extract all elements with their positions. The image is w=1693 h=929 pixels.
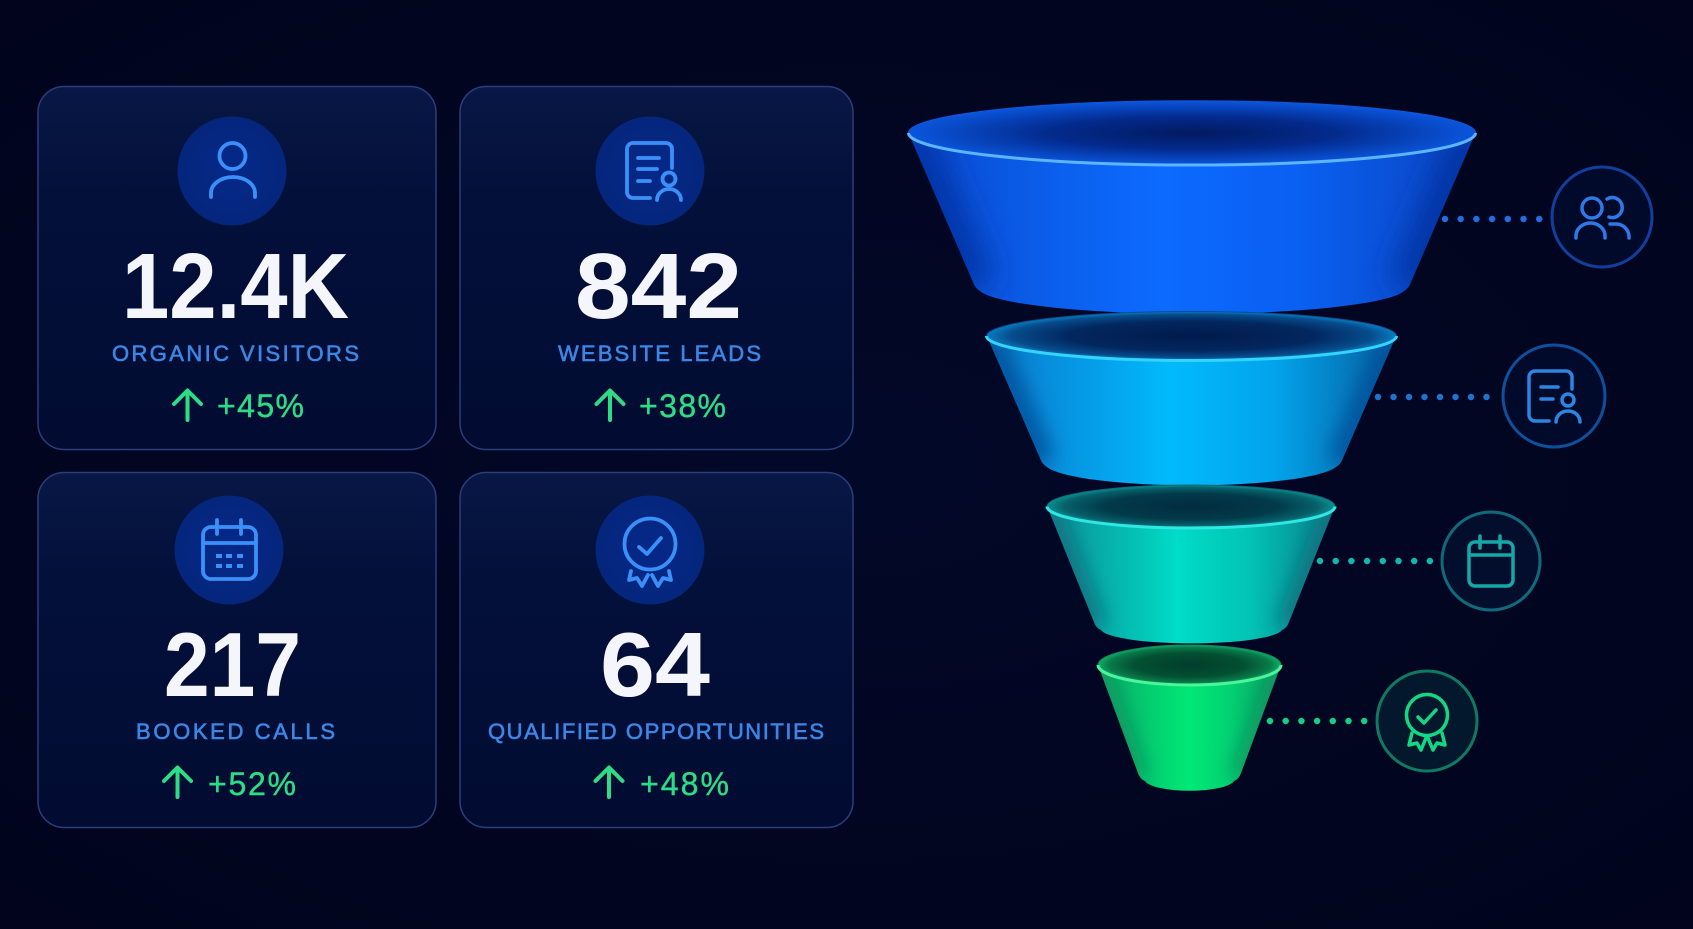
funnel tier 4: green	[1098, 645, 1281, 791]
icon: award badge, green	[1377, 671, 1477, 771]
metric value: 842	[575, 234, 742, 338]
growth	[174, 388, 304, 424]
funnel tier 1: blue	[908, 101, 1476, 314]
growth: +48%	[640, 766, 729, 802]
growth	[596, 766, 729, 802]
icon: calendar	[174, 496, 284, 604]
metric label: ORGANIC VISITORS	[112, 341, 359, 366]
connector dots: tier 4	[1270, 718, 1365, 724]
metric value: 217	[164, 615, 301, 716]
panel: qualified opportunities	[460, 472, 853, 828]
icon: document with person	[596, 116, 704, 226]
metric label: WEBSITE LEADS	[558, 341, 761, 366]
metric label: QUALIFIED OPPORTUNITIES	[488, 719, 824, 744]
growth: +52%	[208, 766, 296, 802]
icon: document badge	[1503, 345, 1605, 447]
panel: website leads	[460, 86, 853, 450]
panel: organic visitors	[38, 86, 436, 450]
funnel tier 2: light blue	[986, 312, 1396, 485]
connector dots: tier 2	[1378, 394, 1502, 400]
metric value: 64	[600, 615, 710, 716]
growth	[596, 388, 726, 424]
metric value: 12.4K	[122, 234, 349, 338]
metric label: BOOKED CALLS	[136, 719, 335, 744]
growth	[164, 766, 296, 802]
icon: person	[178, 116, 286, 226]
icon: calendar badge	[1442, 512, 1540, 610]
icon: people badge	[1552, 167, 1652, 267]
panel: booked calls	[38, 472, 436, 828]
connector dots: tier 1	[1445, 216, 1540, 222]
growth: +38%	[639, 388, 726, 424]
growth: +45%	[217, 388, 304, 424]
connector dots: tier 3	[1320, 558, 1430, 564]
icon: award badge	[596, 496, 704, 604]
funnel tier 3: teal	[1047, 485, 1335, 643]
